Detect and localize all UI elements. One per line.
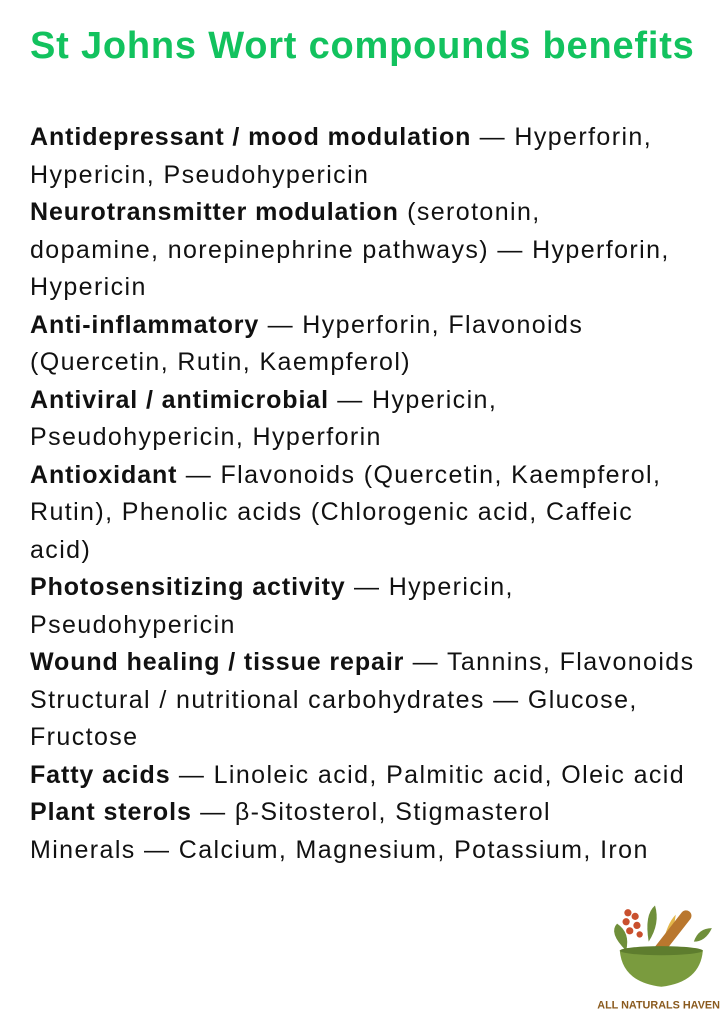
icon: mortar bowl — [620, 951, 703, 987]
text block: compound benefits list: Antiviral / antimicrobial — Hypericin, — [30, 386, 497, 414]
text block: compound benefits list: Structural / nutritional carbohydrates — Glucose, — [30, 686, 638, 714]
text block: compound benefits list: Anti-inflammatory — Hyperforin, Flavonoids — [30, 310, 583, 338]
text block: compound benefits list: Neurotransmitter modulation (serotonin, — [30, 198, 541, 226]
text block: compound benefits list: Plant sterols — β-Sitosterol, Stigmasterol — [30, 798, 551, 826]
text block: compound benefits list: Minerals — Calcium, Magnesium, Potassium, Iron — [30, 836, 649, 864]
title: St Johns Wort compounds benefits — [30, 25, 695, 67]
text block: compound benefits list: Photosensitizing activity — Hypericin, — [30, 573, 514, 601]
text block: compound benefits list: Fructose — [30, 723, 138, 751]
logo: All Naturals Haven — [597, 906, 720, 1011]
text block: compound benefits list: Pseudohypericin — [30, 610, 236, 638]
text block: compound benefits list — [30, 123, 695, 864]
icon: leaves and berries — [614, 906, 712, 951]
text block: compound benefits list: Hypericin — [30, 273, 147, 301]
text block: compound benefits list: Rutin), Phenolic acids (Chlorogenic acid, Caffeic — [30, 498, 633, 526]
icon: pestle — [651, 908, 694, 959]
text block: compound benefits list: Antioxidant — Flavonoids (Quercetin, Kaempferol, — [30, 460, 661, 488]
text block: compound benefits list: Antidepressant / mood modulation — Hyperforin, — [30, 123, 652, 151]
text block: compound benefits list: Hypericin, Pseudohypericin — [30, 160, 369, 188]
text block: compound benefits list: (Quercetin, Rutin, Kaempferol) — [30, 348, 411, 376]
text block: compound benefits list: acid) — [30, 536, 91, 564]
text block: compound benefits list: Wound healing / tissue repair — Tannins, Flavonoids — [30, 648, 695, 676]
text block: compound benefits list: dopamine, norepinephrine pathways) — Hyperforin, — [30, 236, 670, 264]
logo text: ALL NATURALS HAVEN — [597, 999, 720, 1011]
text block: compound benefits list: Pseudohypericin, Hyperforin — [30, 423, 382, 451]
text block: compound benefits list: Fatty acids — Linoleic acid, Palmitic acid, Oleic acid — [30, 760, 685, 788]
